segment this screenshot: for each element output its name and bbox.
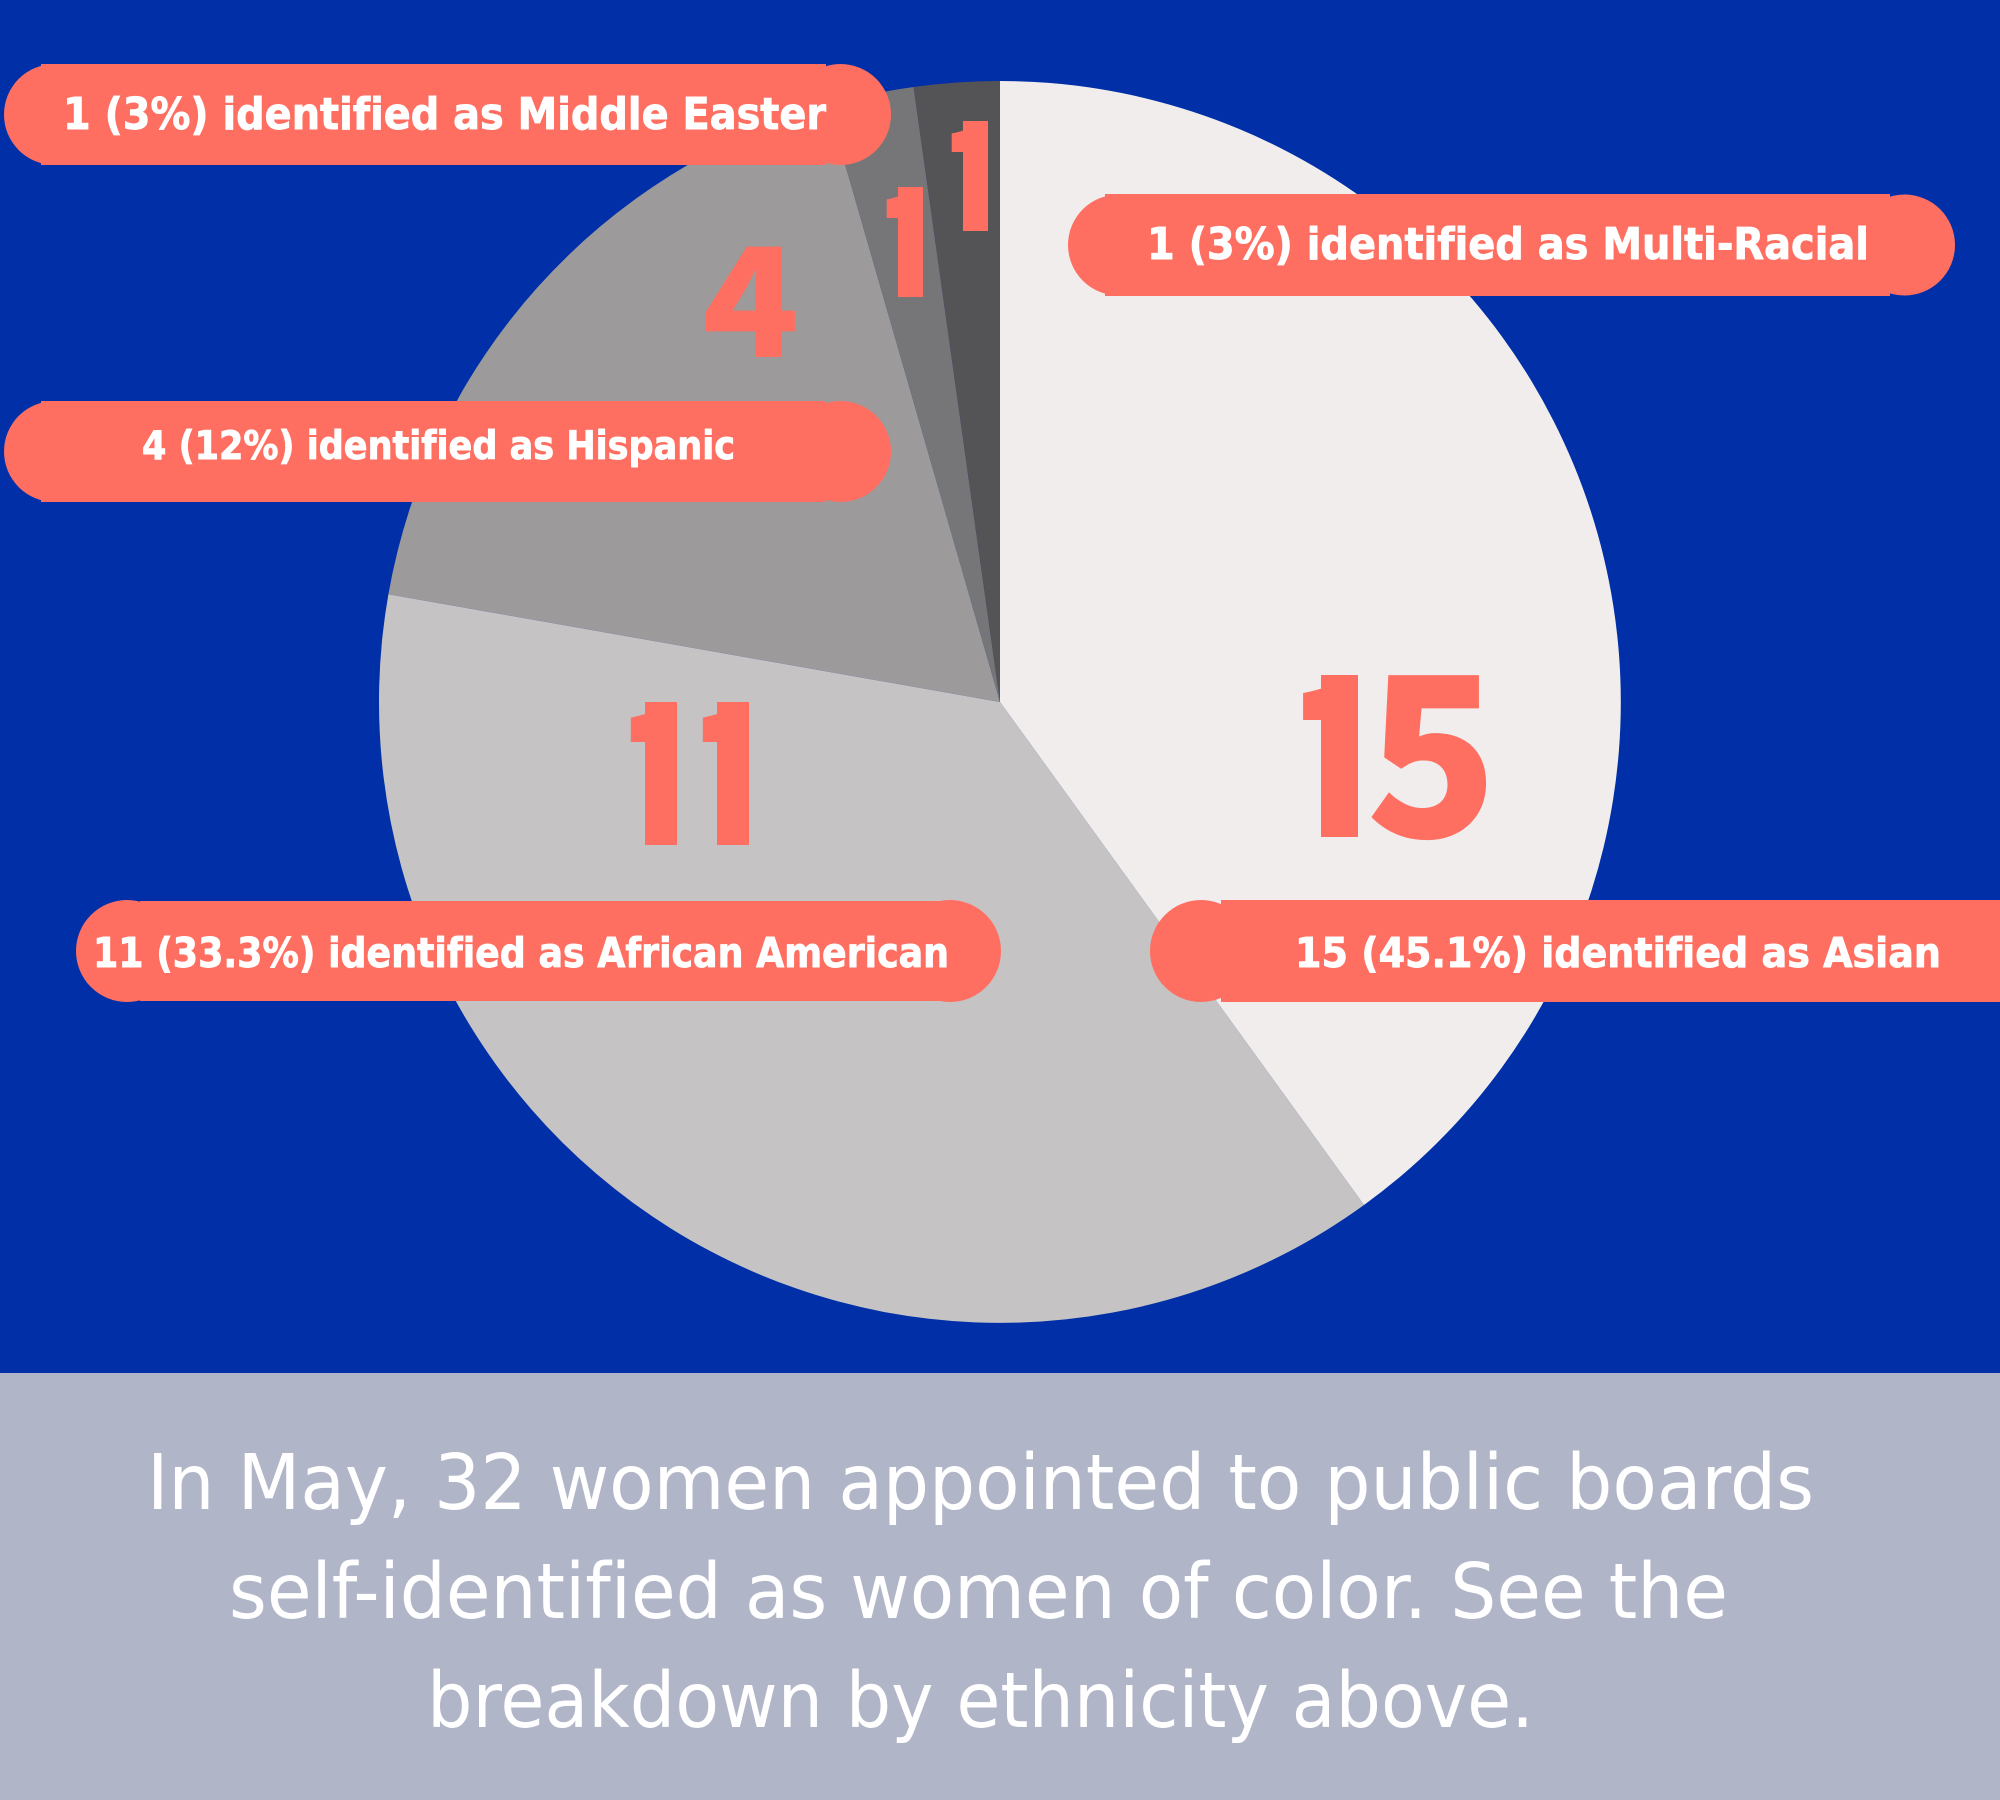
big number: 4 Hispanic: 4 — [702, 181, 799, 401]
big number: 15 Asian: 5 — [1366, 579, 1498, 902]
callout: Asian: 15 (45.1%) identified as Asian — [1295, 929, 1941, 977]
big number: 1 Middle Eastern — [886, 187, 923, 297]
big number: 11 African American: 1 — [688, 628, 798, 894]
callout: Hispanic — [4, 401, 891, 502]
big number: 15 Asian: 1 — [1288, 595, 1411, 892]
big number: 1 Middle Eastern: 1 — [876, 133, 960, 335]
slice: Middle Eastern — [828, 87, 1000, 702]
big number: 15 Asian — [1303, 675, 1486, 840]
big number: 11 African American — [630, 702, 749, 845]
caption text: self-identified as women of color. See the — [229, 1548, 1728, 1637]
background: blue panel — [0, 0, 2000, 1373]
slice: African American — [379, 594, 1364, 1323]
caption text — [147, 1439, 1814, 1746]
slice: Asian — [1000, 81, 1621, 1205]
caption text: In May, 32 women appointed to public boards — [147, 1439, 1814, 1528]
callout: African American: 11 (33.3%) identified as African American — [93, 929, 949, 977]
callout: Hispanic: 4 (12%) identified as Hispanic — [142, 424, 735, 469]
big number: 1 Multi-Racial — [952, 121, 988, 231]
big number: 1 Multi-Racial: 1 — [941, 67, 1025, 269]
callout: Asian — [1150, 900, 2000, 1002]
callout: Multi-Racial — [1068, 194, 1955, 296]
callout: African American — [76, 900, 1001, 1002]
caption text: breakdown by ethnicity above. — [427, 1657, 1534, 1746]
slice: Hispanic — [388, 105, 1000, 702]
big number: 11 African American: 1 — [616, 628, 726, 894]
caption panel — [0, 1373, 2000, 1800]
pie chart: ethnicity breakdown — [379, 81, 1621, 1323]
slice: Multi-Racial — [914, 81, 1000, 702]
callout: Multi-Racial: 1 (3%) identified as Multi-Racial — [1147, 219, 1869, 270]
callout: Middle Eastern — [4, 64, 891, 165]
callout: Middle Eastern: 1 (3%) identified as Middle Easter — [63, 89, 826, 140]
